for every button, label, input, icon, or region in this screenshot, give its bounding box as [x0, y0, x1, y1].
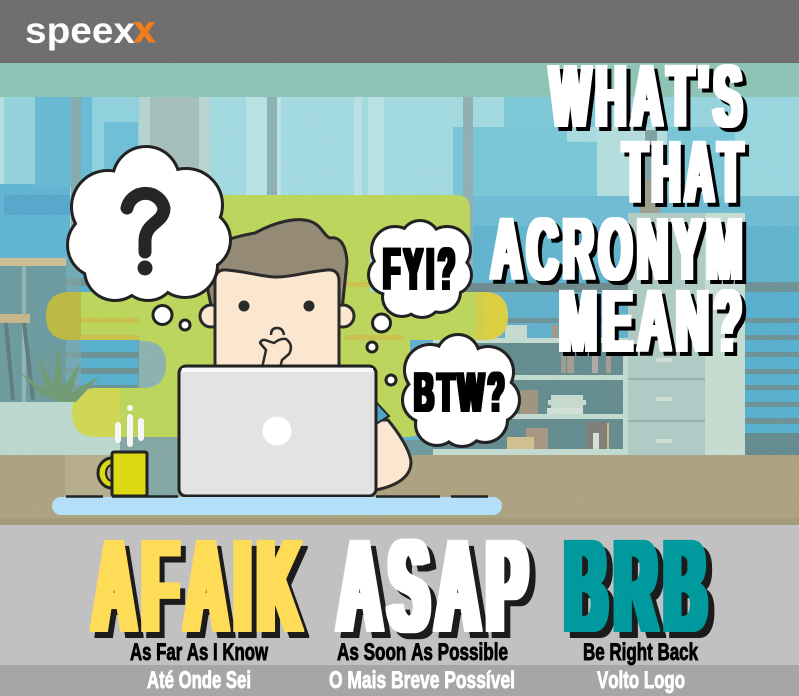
person	[200, 220, 411, 490]
portuguese meanings: Até Onde Sei	[147, 667, 251, 694]
plant	[14, 345, 100, 402]
green blob shapes	[46, 195, 508, 440]
coffee mug	[98, 405, 147, 496]
left city windows	[0, 97, 384, 277]
arm	[376, 420, 411, 490]
lower left wall with blinds	[0, 258, 140, 455]
floor	[0, 437, 799, 525]
right window blinds	[745, 282, 799, 455]
infographic canvas: ASAP	[338, 512, 534, 659]
hair	[202, 220, 347, 310]
thought bubbles middle	[367, 314, 396, 385]
grain overlay	[0, 0, 799, 525]
thought cloud: FYI	[370, 222, 470, 316]
shelf objects	[505, 325, 611, 449]
portuguese meanings: Volto Logo	[597, 667, 685, 694]
thought cloud: question mark	[69, 148, 229, 299]
blob tints and stripes	[46, 282, 508, 437]
bottom panel	[0, 525, 799, 696]
infographic canvas: AFAIK	[93, 512, 307, 659]
english meanings: Be Right Back	[583, 639, 698, 666]
right city windows	[453, 97, 799, 287]
english meanings: As Soon As Possible	[337, 639, 508, 666]
bookshelf and cabinets	[400, 213, 799, 455]
thought cloud: BTW	[404, 336, 518, 445]
face	[215, 270, 339, 368]
sleeve	[376, 402, 389, 424]
laptop logo	[262, 416, 292, 446]
thought bubbles left	[153, 306, 190, 330]
ears	[200, 305, 354, 327]
eyes	[238, 300, 250, 312]
acronym: ASAP	[338, 512, 540, 665]
infographic canvas: AFAIK	[98, 518, 312, 665]
title	[491, 48, 751, 374]
portuguese meanings: O Mais Breve Possível	[329, 667, 515, 694]
portuguese meanings	[147, 667, 685, 694]
thought cloud: FYI: FYI?	[383, 237, 459, 302]
logo: speexx: speex	[25, 10, 135, 51]
stool	[0, 314, 33, 400]
icon: question mark	[127, 193, 164, 276]
english meanings	[130, 639, 698, 666]
laptop	[179, 366, 376, 496]
logo: speexx: x	[134, 9, 155, 50]
acronym: BRB	[565, 512, 720, 665]
steam	[115, 405, 144, 447]
header band	[0, 0, 799, 63]
nose	[271, 328, 284, 335]
desk	[52, 496, 502, 515]
english meanings: As Far As I Know	[130, 639, 268, 666]
blinds behind shelf	[400, 282, 628, 455]
title lettering	[491, 48, 747, 370]
title shadow	[495, 52, 751, 374]
infographic canvas: ASAP	[344, 518, 540, 665]
office scene background	[0, 63, 799, 525]
hand	[260, 339, 291, 368]
label: BTW?: BTW?	[414, 361, 508, 423]
acronym: AFAIK	[93, 512, 312, 665]
gray translucent blob	[139, 341, 166, 388]
